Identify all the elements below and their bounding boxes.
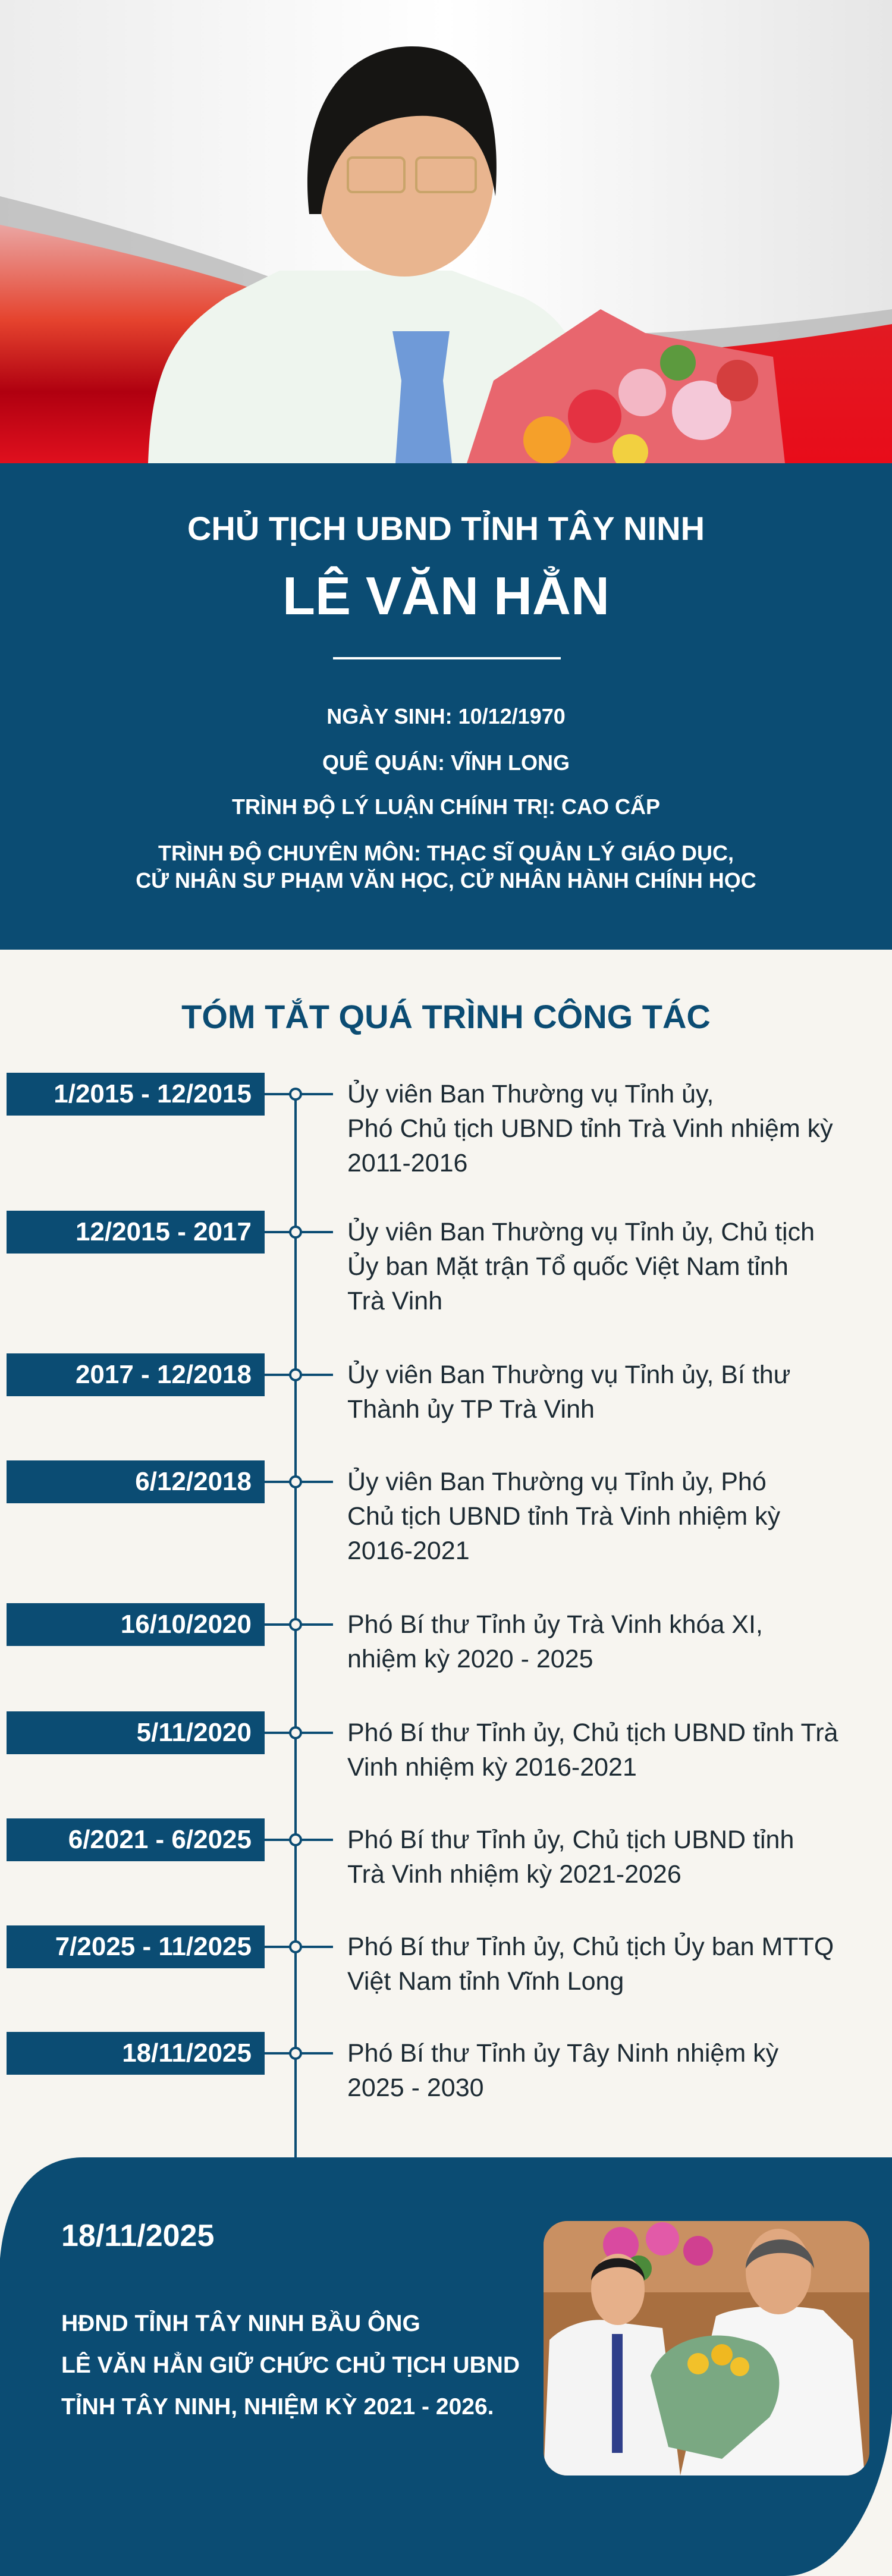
entry 1: 2011-2016: [347, 1149, 467, 1177]
info text: TRÌNH ĐỘ CHUYÊN MÔN: THẠC SĨ QUẢN LÝ GIÁO DỤC,: [158, 841, 734, 865]
entry 3: Ủy viên Ban Thường vụ Tỉnh ủy, Bí thư: [347, 1361, 790, 1389]
timeline connectors: [265, 1088, 333, 2060]
entry 9: 2025 - 2030: [347, 2074, 484, 2102]
panel: election result: [0, 2157, 892, 2576]
man: [148, 271, 592, 463]
entry 4: 2016-2021: [347, 1537, 470, 1565]
entry 6: [7, 1711, 838, 1782]
entry 9: [7, 2032, 778, 2102]
entry 3: Thành ủy TP Trà Vinh: [347, 1395, 595, 1424]
entry 4: 6/12/2018: [135, 1467, 252, 1496]
entry 1: Ủy viên Ban Thường vụ Tỉnh ủy,: [347, 1080, 714, 1108]
entry 5: [7, 1603, 763, 1673]
entry 8: 7/2025 - 11/2025: [55, 1932, 252, 1961]
entry 6: 5/11/2020: [137, 1718, 252, 1747]
title: CHỦ TỊCH UBND TỈNH TÂY NINH: [187, 510, 705, 547]
panel: profile: [0, 463, 892, 950]
info text: TRÌNH ĐỘ LÝ LUẬN CHÍNH TRỊ: CAO CẤP: [232, 794, 660, 819]
entry 8: [7, 1925, 834, 1996]
entry 5: nhiệm kỳ 2020 - 2025: [347, 1645, 593, 1673]
flowers: [467, 309, 785, 463]
entry 2: [7, 1211, 815, 1315]
body text: TỈNH TÂY NINH, NHIỆM KỲ 2021 - 2026.: [61, 2394, 494, 2420]
entry 1: [7, 1073, 833, 1177]
body text: LÊ VĂN HẲN GIỮ CHỨC CHỦ TỊCH UBND: [61, 2352, 520, 2378]
entry 3: 2017 - 12/2018: [76, 1360, 252, 1389]
body text: [61, 2310, 520, 2420]
info text: NGÀY SINH: 10/12/1970: [326, 704, 566, 728]
info text: [136, 704, 756, 893]
heading: timeline: TÓM TẮT QUÁ TRÌNH CÔNG TÁC: [181, 998, 711, 1035]
entry 7: Trà Vinh nhiệm kỳ 2021-2026: [347, 1860, 681, 1889]
timeline line: [294, 1094, 297, 2159]
date heading: 18/11/2025: [61, 2219, 214, 2253]
body text: HĐND TỈNH TÂY NINH BẦU ÔNG: [61, 2311, 420, 2336]
entry 6: Phó Bí thư Tỉnh ủy, Chủ tịch UBND tỉnh Trà: [347, 1719, 838, 1747]
entry 2: 12/2015 - 2017: [76, 1217, 252, 1246]
info text: QUÊ QUÁN: VĨNH LONG: [322, 750, 570, 775]
entry 9: Phó Bí thư Tỉnh ủy Tây Ninh nhiệm kỳ: [347, 2039, 778, 2068]
entry 8: Phó Bí thư Tỉnh ủy, Chủ tịch Ủy ban MTTQ: [347, 1933, 834, 1961]
entry 3: [7, 1353, 790, 1424]
photo: [544, 2221, 869, 2476]
entry 5: Phó Bí thư Tỉnh ủy Trà Vinh khóa XI,: [347, 1610, 763, 1639]
entry 4: Chủ tịch UBND tỉnh Trà Vinh nhiệm kỳ: [347, 1502, 780, 1531]
entry 8: Việt Nam tỉnh Vĩnh Long: [347, 1967, 624, 1996]
entry 2: Ủy viên Ban Thường vụ Tỉnh ủy, Chủ tịch: [347, 1218, 815, 1246]
entry 5: 16/10/2020: [121, 1610, 252, 1639]
entry 2: Ủy ban Mặt trận Tổ quốc Việt Nam tỉnh: [347, 1252, 789, 1281]
entry 2: Trà Vinh: [347, 1287, 442, 1315]
entry 4: Ủy viên Ban Thường vụ Tỉnh ủy, Phó: [347, 1468, 767, 1496]
entry 6: Vinh nhiệm kỳ 2016-2021: [347, 1753, 637, 1782]
entry 7: 6/2021 - 6/2025: [68, 1825, 252, 1854]
entry 9: 18/11/2025: [122, 2038, 252, 2068]
entry 7: [7, 1818, 794, 1889]
name: LÊ VĂN HẲN: [282, 567, 610, 626]
info text: CỬ NHÂN SƯ PHẠM VĂN HỌC, CỬ NHÂN HÀNH CHÍNH HỌC: [136, 868, 756, 893]
entry 1: Phó Chủ tịch UBND tỉnh Trà Vinh nhiệm kỳ: [347, 1114, 833, 1143]
entry 4: [7, 1460, 780, 1565]
entry 1: 1/2015 - 12/2015: [54, 1079, 252, 1108]
entry 7: Phó Bí thư Tỉnh ủy, Chủ tịch UBND tỉnh: [347, 1826, 794, 1854]
divider line: [333, 657, 561, 659]
header photo: [0, 0, 892, 463]
